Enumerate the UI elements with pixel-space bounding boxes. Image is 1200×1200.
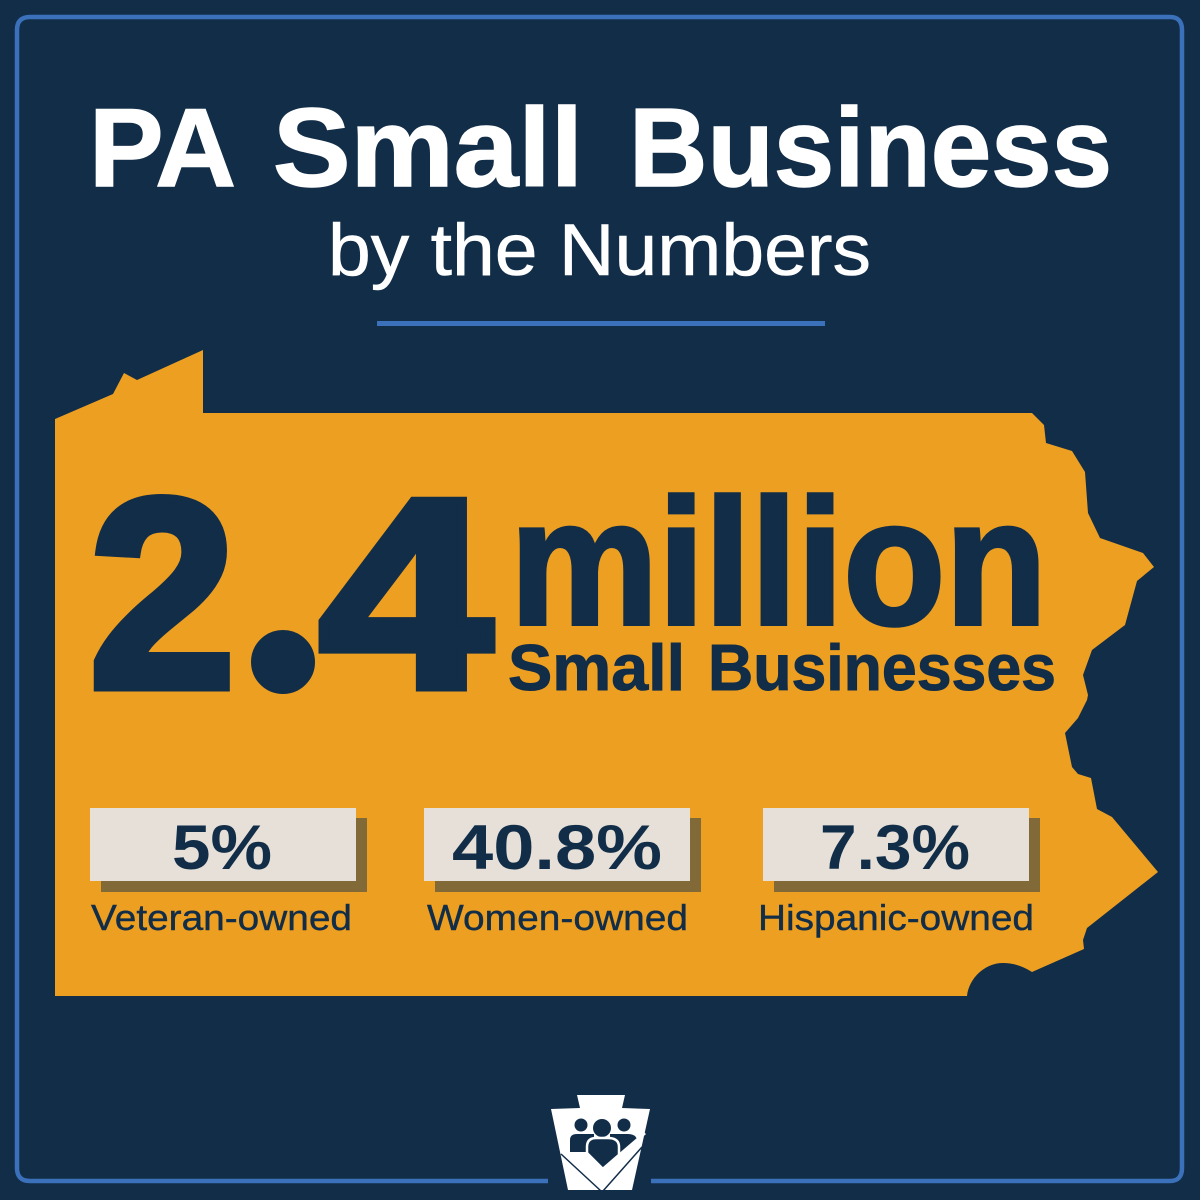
title (89, 86, 1112, 291)
stat: hispanic-owned: Hispanic-owned (758, 897, 1034, 938)
title line 1: PA (89, 86, 236, 210)
big number 2.4: 2 (89, 444, 236, 745)
Pennsylvania state map shape (55, 350, 1158, 996)
stat: hispanic-owned: 7.3% (820, 813, 970, 883)
icon: keystone logo with people and check mark (551, 1095, 650, 1191)
stat: hispanic-owned (758, 808, 1040, 938)
subhead: Small Businesses: Small (508, 631, 685, 704)
stat: veteran-owned: 5% (172, 813, 272, 883)
big number 2.4 (89, 444, 494, 745)
title line 2: by the Numbers (328, 210, 871, 291)
subhead: Small Businesses: Businesses (708, 631, 1056, 704)
title line 1 (89, 86, 1112, 210)
stat: women-owned: Women-owned (427, 897, 688, 938)
stat: women-owned: 40.8% (452, 813, 662, 883)
word: million: million (510, 462, 1047, 662)
stat: veteran-owned: Veteran-owned (91, 897, 352, 938)
title line 1: Business (629, 86, 1112, 210)
big number 2.4: 4 (319, 444, 494, 745)
title line 1: Small (273, 86, 583, 210)
subhead: Small Businesses (508, 631, 1056, 704)
headline stat: 2.4 million small businesses (89, 444, 1056, 745)
stat: women-owned (424, 808, 701, 938)
stat: veteran-owned (90, 808, 367, 938)
